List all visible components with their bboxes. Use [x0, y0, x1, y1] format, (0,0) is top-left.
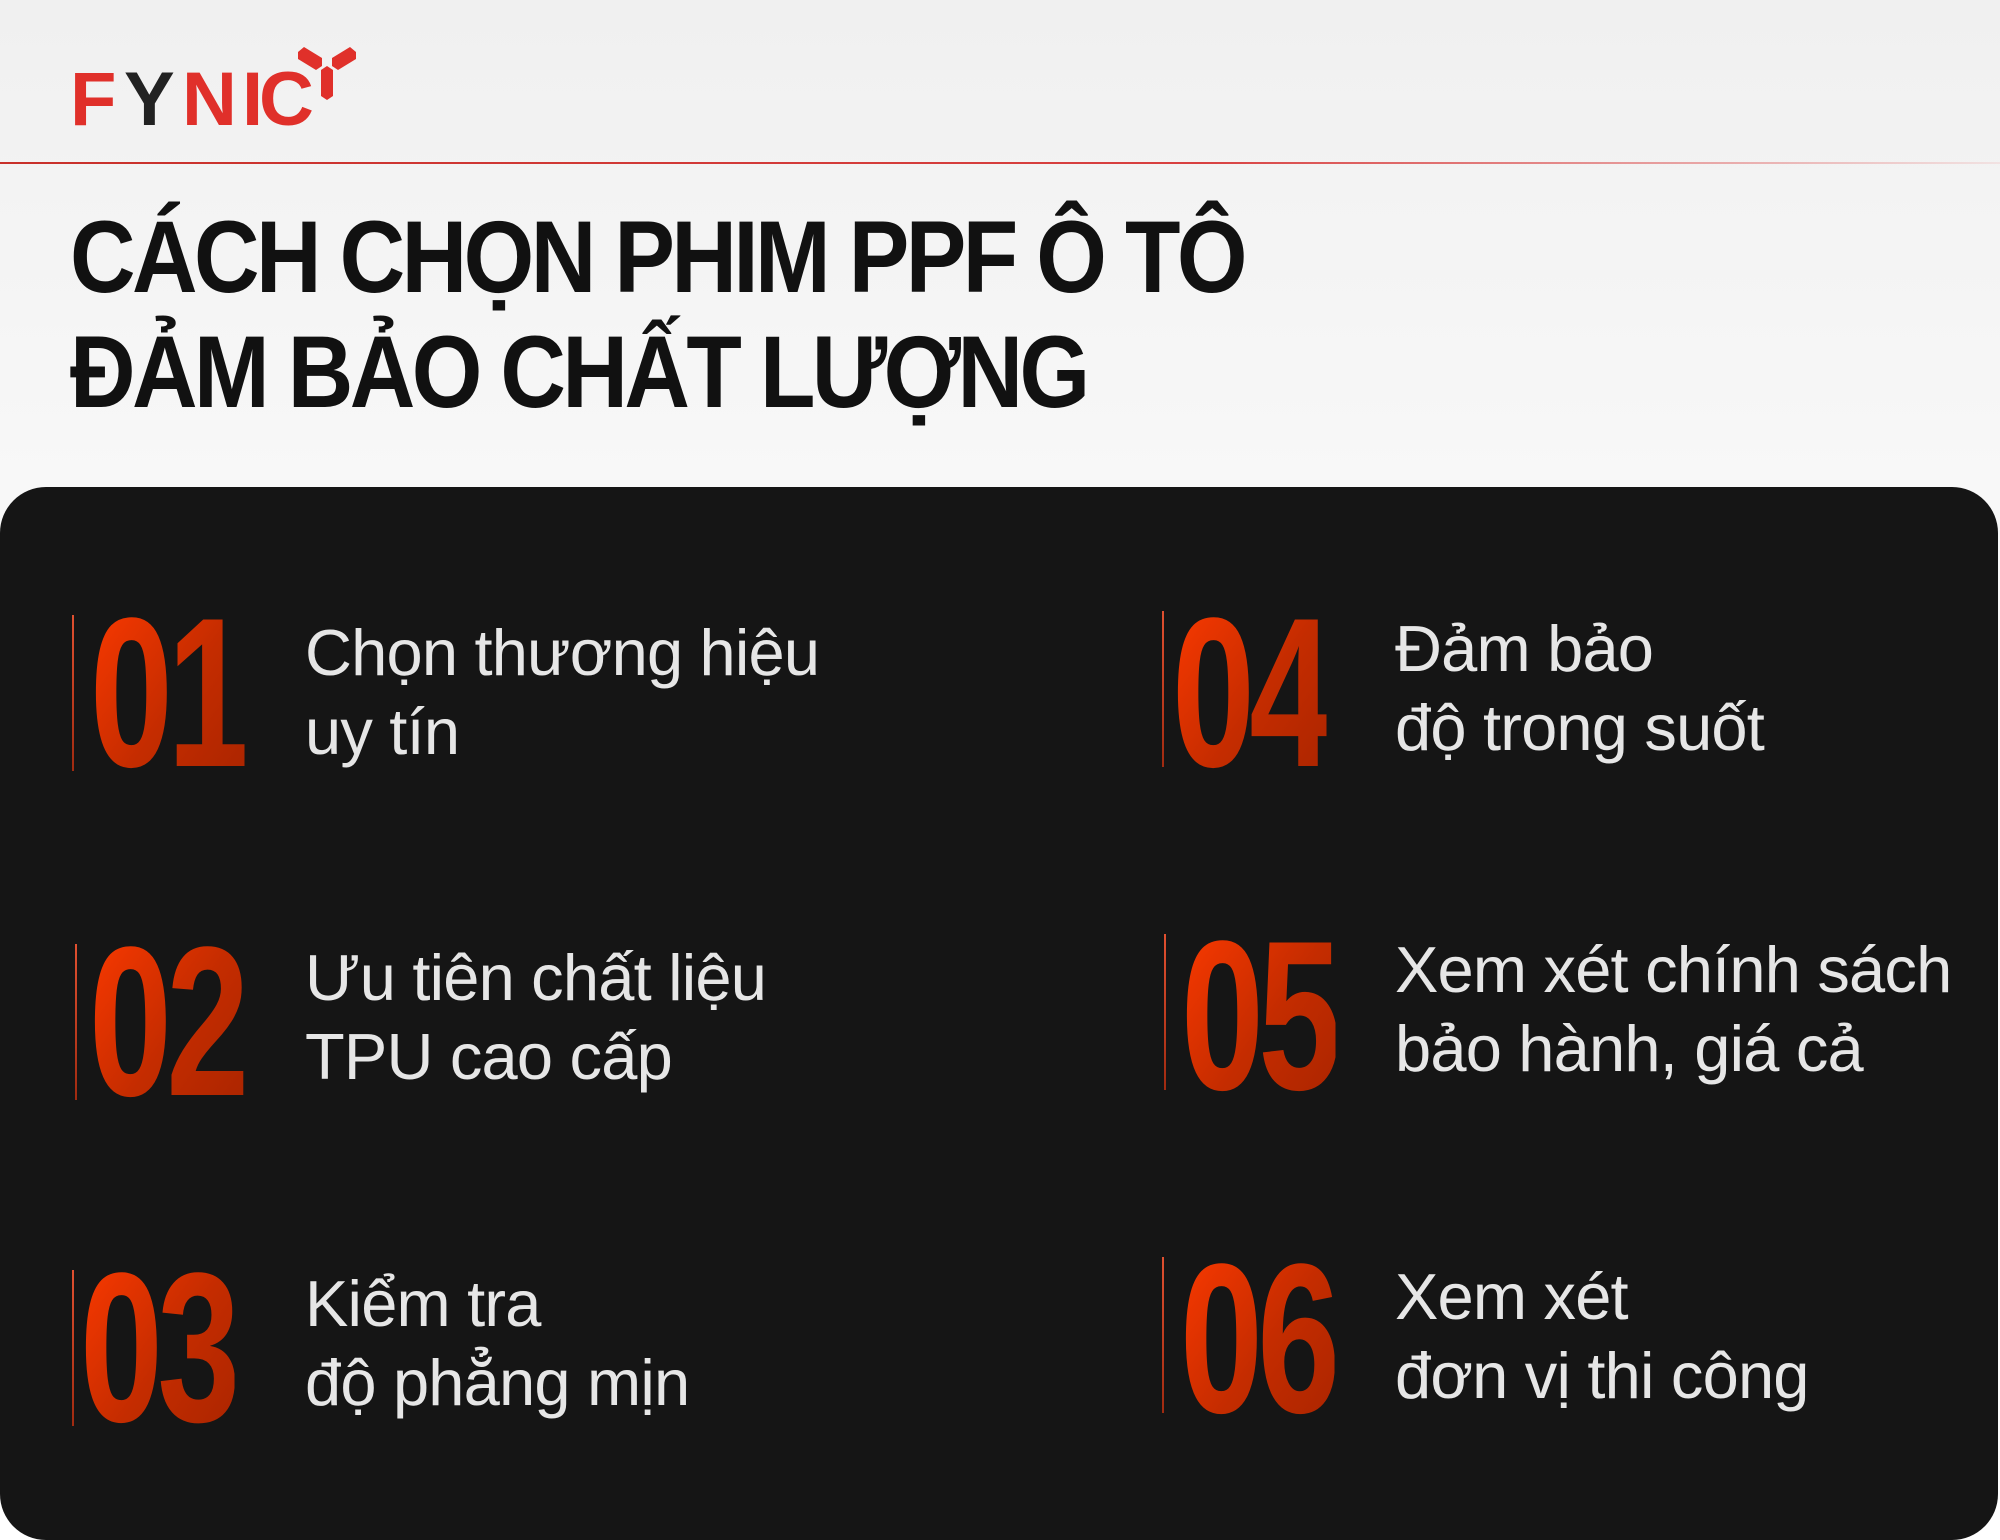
step 04: độ trong suốt: [1395, 691, 1764, 764]
step 03: Kiểm tra: [305, 1267, 541, 1340]
logo text: [70, 57, 314, 142]
step 05: bảo hành, giá cả: [1395, 1012, 1863, 1085]
title: CÁCH CHỌN PHIM PPF Ô TÔ: [70, 200, 1244, 314]
title: ĐẢM BẢO CHẤT LƯỢNG: [70, 315, 1087, 429]
logo text: N: [182, 57, 237, 142]
step 01: 01: [90, 574, 245, 812]
step 05: 05: [1181, 897, 1336, 1135]
step 06: 06: [1180, 1220, 1335, 1458]
step 03: 03: [80, 1229, 235, 1467]
logo text: F: [70, 57, 116, 142]
step 02: [75, 903, 766, 1141]
step 06: Xem xét: [1395, 1260, 1628, 1333]
step 02: Ưu tiên chất liệu: [305, 941, 766, 1014]
panel: steps: [0, 487, 1998, 1540]
step 02: 02: [89, 903, 244, 1141]
step 01: Chọn thương hiệu: [305, 616, 819, 689]
logo: [70, 47, 356, 142]
step 04: Đảm bảo: [1395, 612, 1653, 685]
step 04: [1162, 574, 1764, 812]
step 05: [1164, 897, 1951, 1135]
title: [70, 200, 1244, 429]
logo text: C: [259, 57, 314, 142]
step 06: [1162, 1220, 1809, 1458]
step 01: uy tín: [305, 695, 459, 768]
divider line: [0, 162, 2000, 164]
step 03: [72, 1229, 689, 1467]
step 02: TPU cao cấp: [305, 1020, 672, 1093]
icon: logo mark: [298, 47, 356, 100]
step 06: đơn vị thi công: [1395, 1339, 1809, 1412]
step 04: 04: [1172, 574, 1327, 812]
logo text: I: [242, 57, 263, 142]
logo text: Y: [124, 57, 175, 142]
step 03: độ phẳng mịn: [305, 1346, 689, 1419]
step 01: [72, 574, 819, 812]
step 05: Xem xét chính sách: [1395, 933, 1951, 1006]
